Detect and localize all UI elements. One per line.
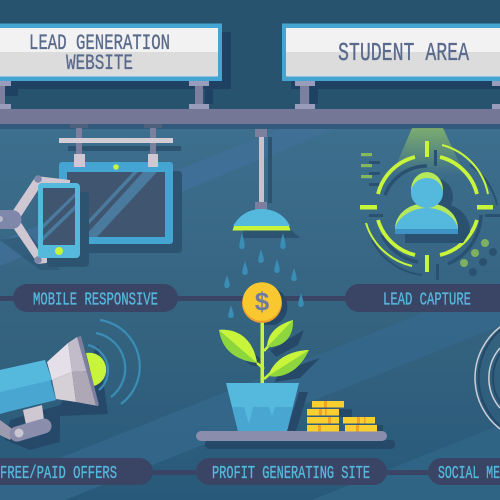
person icon [395,172,470,243]
label: lead capture [345,284,500,312]
green bulb [86,353,106,386]
light cone [392,128,465,175]
money plant [196,282,387,441]
label: social media [428,458,500,485]
water drops [224,233,304,318]
tablet [59,154,182,253]
motion dashes [361,153,380,186]
sign: lead generation website: LEAD GENERATION [29,31,170,56]
phone [38,183,89,267]
megaphone shadow [5,345,108,450]
leaves [219,320,309,379]
sign: lead generation website [0,24,231,109]
label: profit generating site: PROFIT GENERATING SITE [212,464,370,484]
pot [226,383,299,431]
sign: student area [282,24,500,109]
stand [0,405,44,440]
robotic arm [0,175,70,270]
dots [460,239,497,276]
label: mobile responsive: MOBILE RESPONSIVE [33,290,158,310]
label: free/paid offers: FREE/PAID OFFERS [0,464,117,484]
megaphone [0,320,140,450]
sound waves [88,320,140,404]
label: profit generating site [196,458,387,485]
sign: lead generation website: WEBSITE [66,51,133,76]
body [0,360,56,414]
lead capture target [360,128,500,280]
coin flower [242,282,287,384]
hanging rail [59,124,181,155]
tablet and phone illustration [0,124,182,270]
target rings [366,145,488,266]
plant pot shadows [205,330,395,449]
label: mobile responsive [13,284,178,312]
ceiling bar [0,109,500,129]
social media rings [475,327,500,429]
horn [47,336,99,406]
label: free/paid offers [0,458,153,485]
coin flower: $ [255,286,270,316]
shower lamp [232,129,300,238]
shelf [196,431,387,441]
connector lines [0,296,500,475]
target shadow [369,150,500,280]
target ticks [360,141,493,272]
coin stacks [307,401,377,432]
